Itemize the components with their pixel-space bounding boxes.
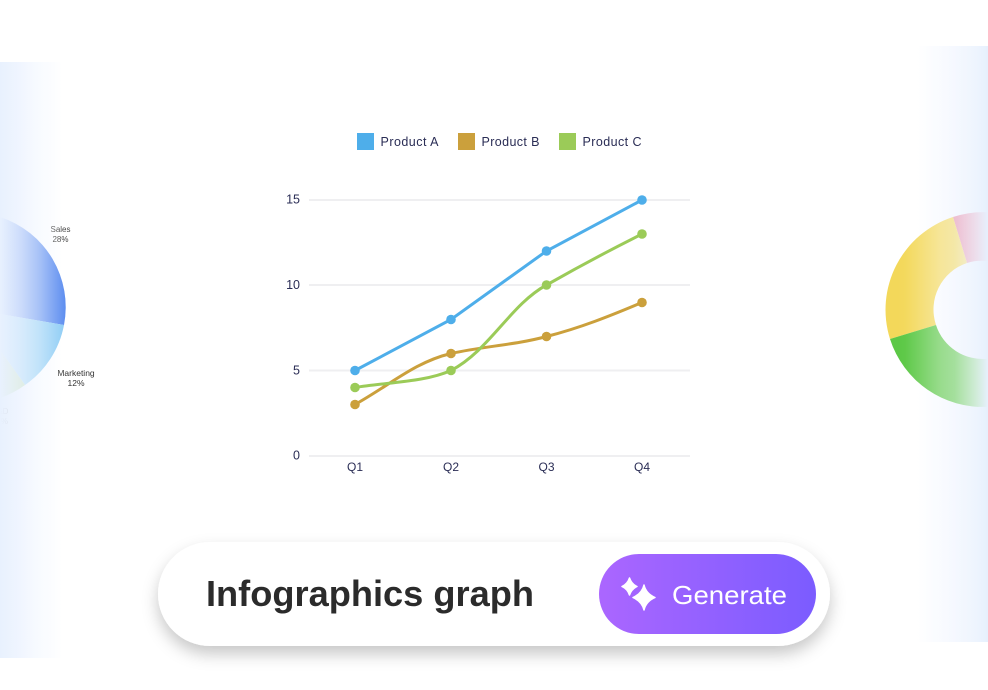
fade overlay right bbox=[898, 46, 988, 642]
label: Marketing: Marketing bbox=[57, 368, 95, 378]
heading: Infographics graph bbox=[206, 573, 534, 614]
y axis labels: 10 bbox=[286, 278, 300, 292]
series: Product A bbox=[350, 195, 647, 375]
panel: right donut chart preview bbox=[886, 46, 988, 642]
pie slice: Sales bbox=[0, 212, 66, 325]
series: Product C bbox=[350, 229, 647, 392]
x axis labels: Q3 bbox=[538, 460, 555, 474]
fade overlay left bbox=[0, 62, 65, 658]
legend item: Product B bbox=[458, 133, 540, 150]
x axis labels: Q4 bbox=[634, 460, 650, 474]
search bar pill bbox=[158, 542, 830, 646]
donut slice: green bbox=[890, 325, 988, 407]
legend bbox=[357, 133, 642, 150]
label: Sales: Sales bbox=[50, 225, 71, 234]
label: Sales value: 28% bbox=[52, 235, 69, 244]
y axis labels: 5 bbox=[293, 364, 300, 378]
y axis labels bbox=[286, 192, 300, 462]
donut slice: yellow bbox=[886, 217, 967, 339]
panel: left pie chart preview bbox=[0, 62, 95, 658]
x axis labels: Q2 bbox=[443, 460, 459, 474]
y axis labels: 15 bbox=[286, 192, 300, 206]
legend item: Product C: Product C bbox=[582, 135, 642, 149]
button label: Generate bbox=[672, 580, 787, 610]
x axis labels bbox=[347, 460, 650, 474]
donut slice: pink bbox=[953, 212, 988, 263]
icon: sparkles bbox=[622, 578, 655, 610]
series: Product B bbox=[350, 298, 647, 409]
legend item: Product A: Product A bbox=[380, 135, 439, 149]
x axis labels: Q1 bbox=[347, 460, 363, 474]
legend item: Product C bbox=[559, 133, 642, 150]
pie slice: Marketing bbox=[0, 309, 64, 385]
y axis labels: 0 bbox=[293, 448, 300, 462]
generate button bbox=[599, 554, 816, 634]
line chart bbox=[286, 133, 690, 474]
legend item: Product B: Product B bbox=[482, 135, 540, 149]
label: Marketing value: 12% bbox=[67, 378, 85, 388]
pie slice: R&D bbox=[0, 309, 25, 403]
legend item: Product A bbox=[357, 133, 439, 150]
